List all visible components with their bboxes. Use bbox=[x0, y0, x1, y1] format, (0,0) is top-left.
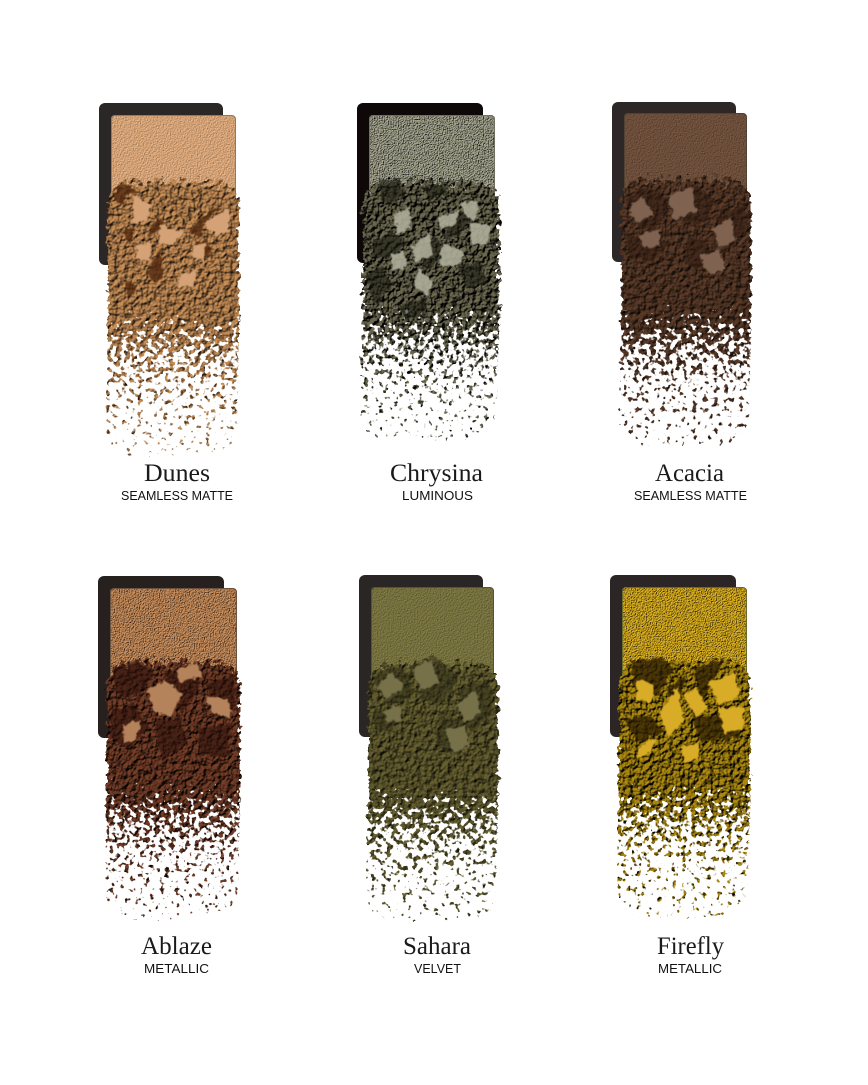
name: Chrysina: Chrysina bbox=[390, 460, 483, 487]
name: Ablaze: Ablaze bbox=[141, 933, 212, 960]
pan and crumbled powder: Sahara bbox=[359, 575, 498, 921]
finish: Velvet: VELVET bbox=[414, 962, 461, 976]
pan and crumbled powder: Acacia bbox=[612, 102, 751, 447]
pan and crumbled powder: Ablaze bbox=[98, 576, 240, 918]
swatch: Sahara bbox=[359, 575, 498, 976]
swatch: Chrysina bbox=[357, 103, 499, 503]
finish: Seamless Matte: SEAMLESS MATTE bbox=[634, 489, 747, 503]
name: Dunes: Dunes bbox=[144, 460, 210, 487]
swatch: Ablaze bbox=[98, 576, 240, 976]
finish: Seamless Matte: SEAMLESS MATTE bbox=[121, 489, 233, 503]
pan and crumbled powder: Dunes bbox=[99, 103, 239, 455]
pan and crumbled powder: Chrysina bbox=[357, 103, 499, 439]
finish: Metallic: METALLIC bbox=[144, 962, 209, 976]
swatch: Firefly bbox=[610, 575, 750, 976]
finish: Metallic: METALLIC bbox=[658, 962, 722, 976]
name: Sahara: Sahara bbox=[403, 933, 471, 960]
swatch: Acacia bbox=[612, 102, 751, 503]
name: Firefly: Firefly bbox=[657, 933, 724, 960]
finish: Luminous: LUMINOUS bbox=[402, 489, 473, 503]
pan and crumbled powder: Firefly bbox=[610, 575, 750, 917]
swatch: Dunes bbox=[99, 103, 239, 503]
name: Acacia: Acacia bbox=[655, 460, 724, 487]
